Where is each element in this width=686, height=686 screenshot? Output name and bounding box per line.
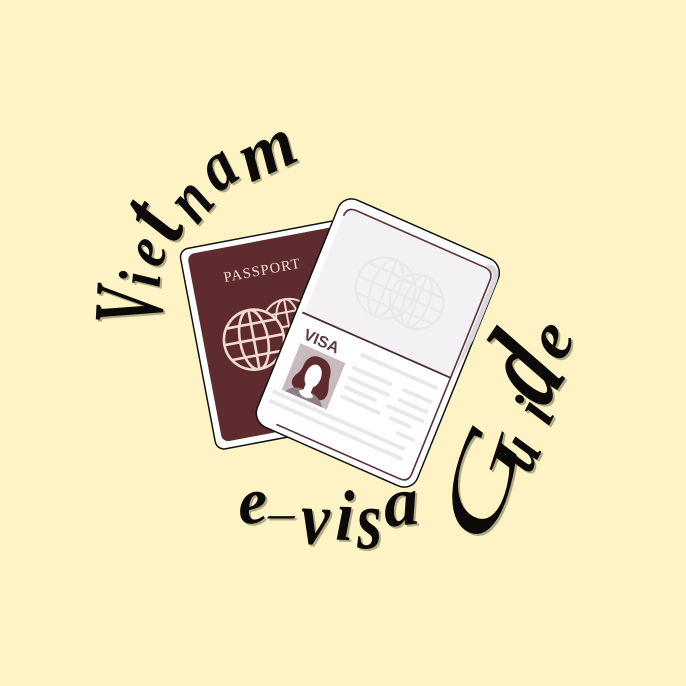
title word: Vietnam: i: [107, 269, 175, 289]
icon: back globe: [257, 294, 321, 357]
panel: visa page: [252, 194, 504, 492]
title word: Vietnam: n: [150, 162, 229, 236]
icon: faint globes watermark: [347, 248, 453, 340]
title word: e-visa: [235, 463, 422, 567]
title word: Guide: u: [477, 422, 556, 482]
title word: e-visa: s: [354, 474, 383, 567]
title word: Guide: e: [509, 306, 590, 371]
title word: Guide: d: [453, 311, 592, 426]
title word: Vietnam: a: [183, 126, 251, 207]
title word: Guide: [418, 306, 592, 555]
title word: e-visa: i: [334, 476, 355, 556]
title word: Vietnam: m: [224, 101, 308, 197]
title word: Vietnam: V: [73, 281, 185, 327]
page outline: [262, 207, 494, 483]
upper page: [304, 207, 494, 378]
title word: e-visa: v: [299, 477, 332, 562]
divider line: [302, 312, 451, 378]
title word: Vietnam: e: [110, 226, 182, 276]
page shadow: [442, 263, 502, 379]
passport label: PASSPORT: [222, 256, 302, 286]
text lines placeholder: [269, 327, 438, 462]
title word: Vietnam: t: [94, 178, 207, 257]
title word: e-visa: a: [379, 463, 422, 543]
title word: Guide: G: [418, 412, 544, 555]
title word: e-visa: -: [265, 499, 299, 530]
icon: front globe: [219, 305, 289, 375]
title word: Guide: i: [499, 386, 568, 433]
visa label: VISA: [301, 327, 342, 358]
title word: e-visa: e: [235, 464, 270, 539]
title word: Vietnam: [73, 101, 308, 327]
icon: passport cover: [179, 215, 404, 450]
photo: portrait: [282, 343, 345, 409]
